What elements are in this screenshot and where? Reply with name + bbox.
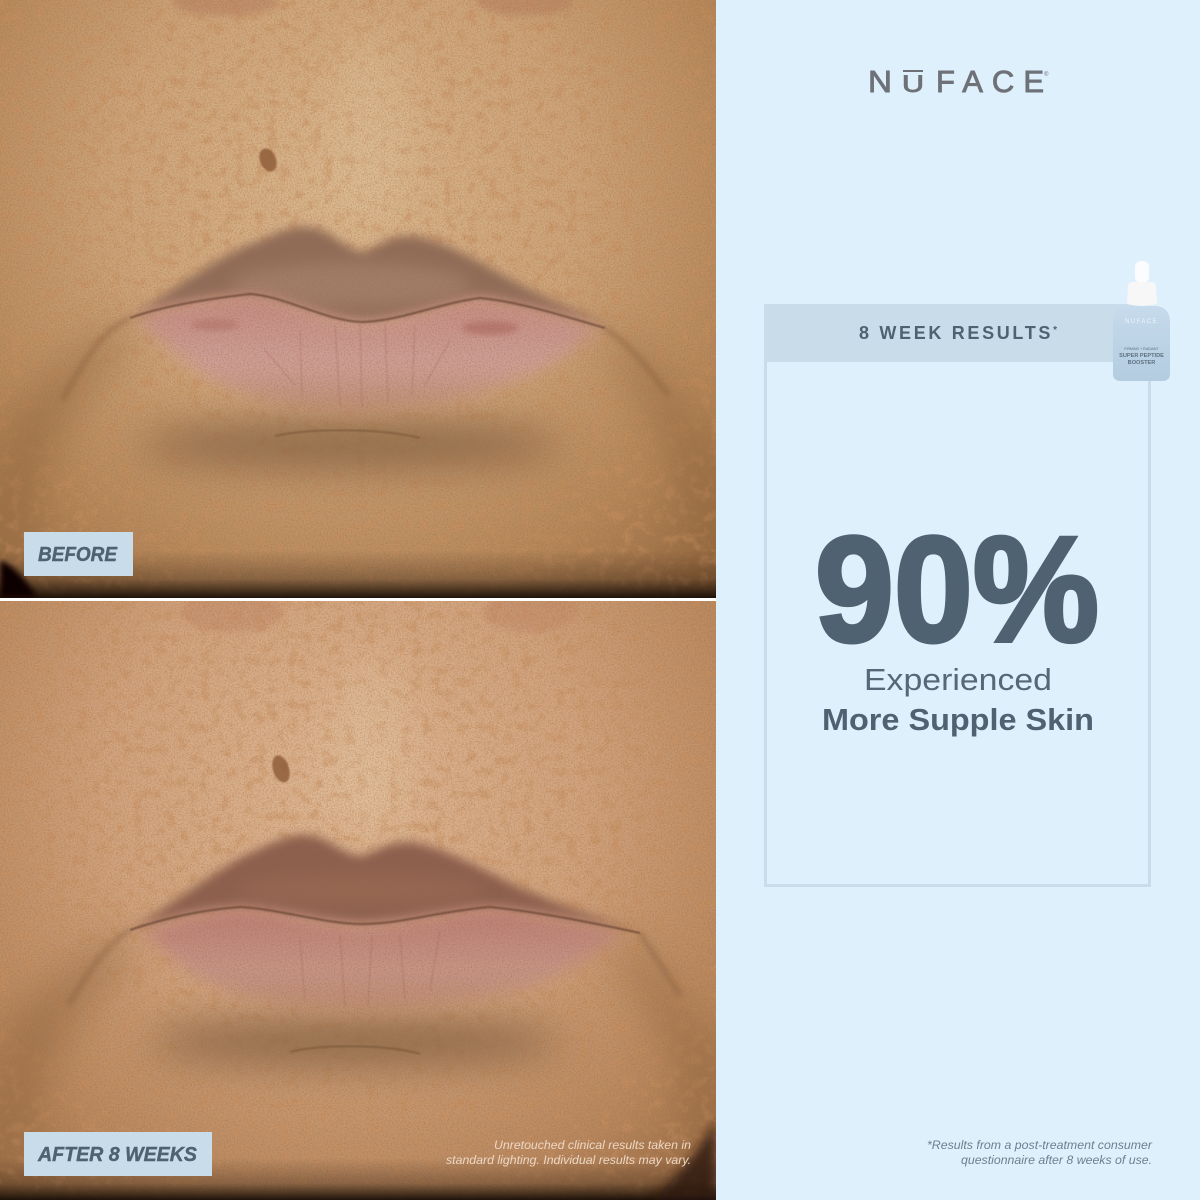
logo: NuFace: FACE [936,64,1044,99]
upper lip [130,835,640,932]
chin shadow [140,419,560,471]
tag: before: BEFORE [38,544,118,566]
product bottle [1113,261,1170,381]
product bottle: FIRMING + RADIANT [1124,347,1159,351]
lip corner creases [68,930,680,1005]
photo disclaimer: standard lighting. Individual results may vary. [446,1155,691,1167]
footnote: *Results from a post-treatment consumer [927,1140,1153,1152]
logo: NuFace [868,64,1049,99]
product bottle: BOOSTER [1128,360,1155,366]
nostril shadows and philtrum [173,0,277,16]
bottle body [1113,306,1170,381]
card heading: 8 WEEK RESULTS [859,323,1050,343]
photo: before lips close-up [0,0,716,598]
upper lip [130,227,610,326]
logo: NuFace: ® [1044,71,1049,78]
tag: after 8 weeks [24,1132,212,1176]
nostril shadows and philtrum [182,601,284,632]
mouth line [130,907,640,933]
nasolabial and cheek shading [0,936,131,1132]
tag: after 8 weeks: AFTER 8 WEEKS [37,1144,198,1166]
card header band [764,304,1151,362]
photo disclaimer [446,1140,691,1167]
product bottle: SUPER PEPTIDE [1119,353,1164,359]
bottom vignette [0,1158,716,1200]
mole [258,148,278,172]
footnote [927,1140,1153,1167]
photo: after lips close-up [0,592,716,1200]
photo disclaimer: Unretouched clinical results taken in [494,1140,691,1152]
logo: NuFace: N [868,64,892,99]
lip corner creases [62,318,668,400]
stat caption line 2: More Supple Skin [822,702,1094,737]
photo divider [0,597,716,602]
tag: before [24,532,133,576]
skin texture [0,0,716,598]
results card [764,304,1151,886]
dropper collar [1127,282,1157,306]
stat caption line 1: Experienced [864,662,1052,697]
logo: NuFace: U [902,71,924,98]
lower lip [140,908,625,1012]
bottle label: NUFACE [1125,319,1158,325]
big stat: 90% [815,505,1099,673]
lower lip [135,295,600,412]
bottom vignette [0,555,716,598]
skin texture [0,601,716,1200]
mouth line [130,294,605,328]
mole [272,754,290,784]
footnote: questionnaire after 8 weeks of use. [961,1155,1152,1167]
dropper bulb [1135,261,1149,283]
nasolabial and cheek shading [0,328,128,528]
chin shadow [150,1016,560,1068]
card heading: * [1053,325,1057,336]
